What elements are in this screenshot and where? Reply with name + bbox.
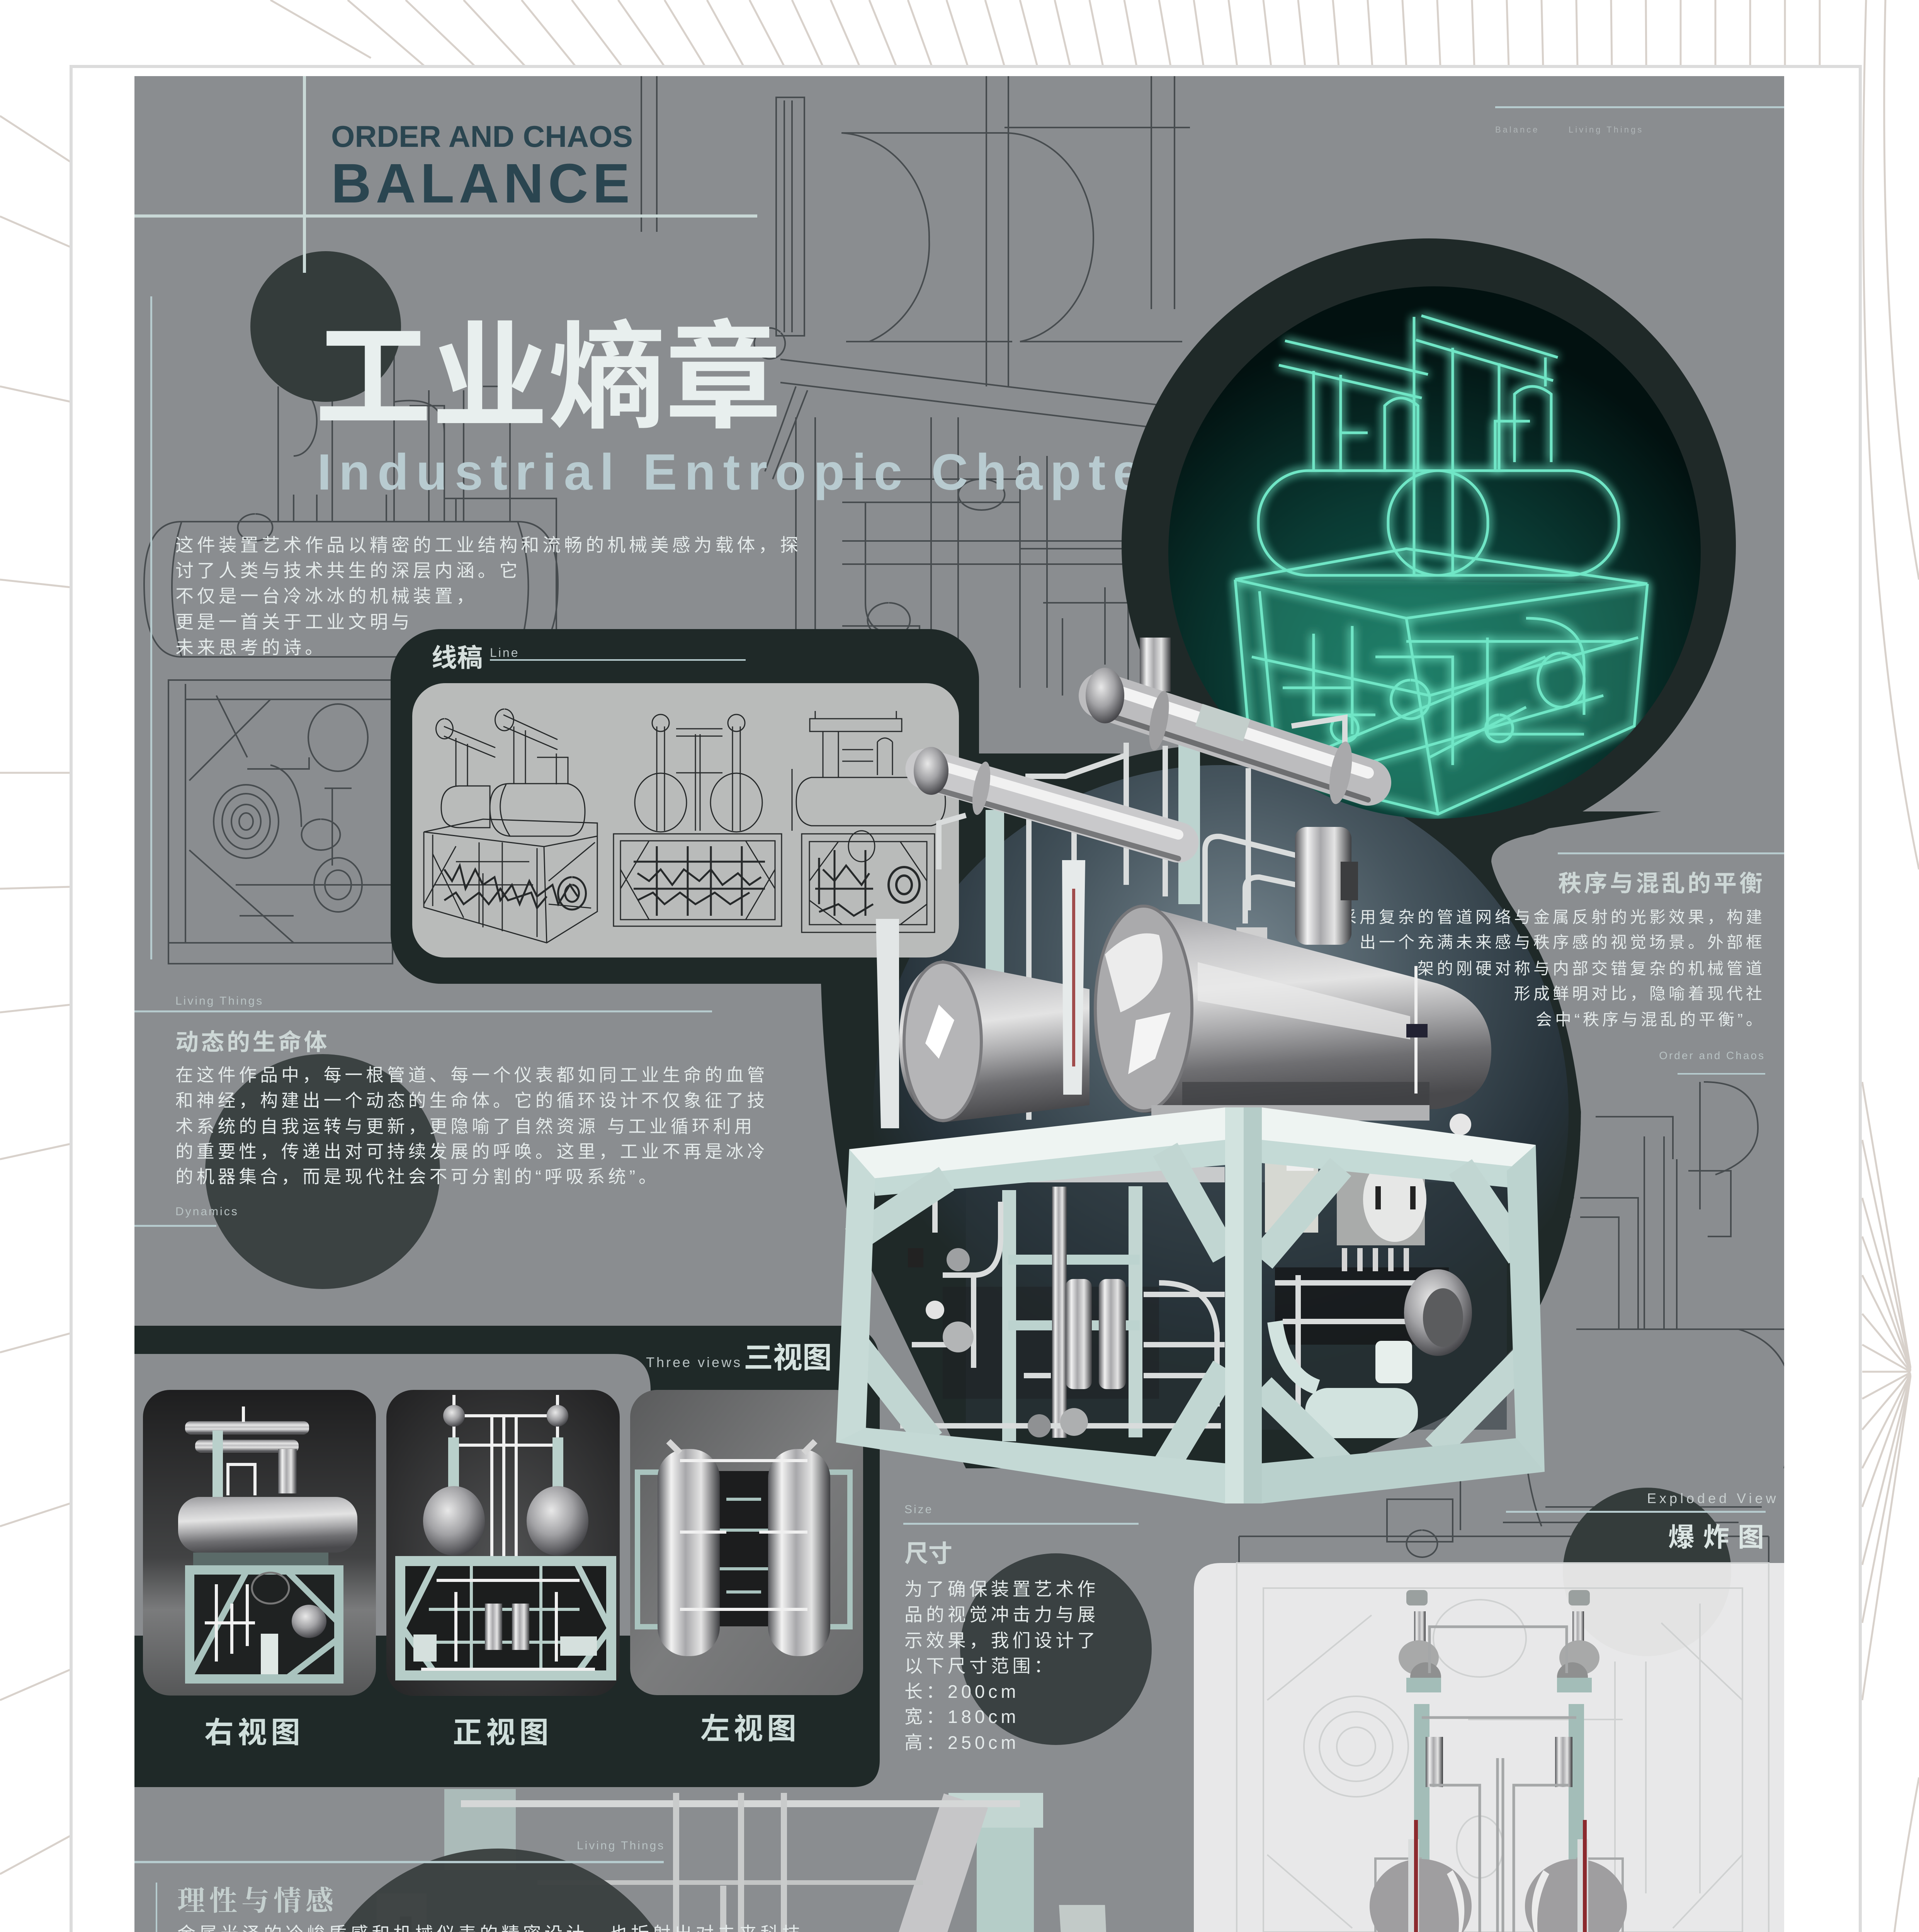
paragraph: 宽：180cm (904, 1706, 1019, 1727)
exploded: upper assemblies (1399, 1590, 1599, 1932)
top right small label: Balance (1495, 125, 1540, 134)
view labels: 正视图 (453, 1716, 552, 1749)
brand: order and chaos: BALANCE (331, 152, 630, 214)
paragraph: 为了确保装置艺术作 (904, 1579, 1099, 1599)
label: line: Line (490, 646, 519, 660)
right sphere (827, 1905, 1236, 1932)
top right small label (1495, 106, 1784, 134)
section: size: Size (904, 1503, 933, 1516)
intro text: 讨了人类与技术共生的深层内涵。它 (175, 560, 521, 581)
gradient disc behind hero (873, 765, 1569, 1461)
hero: vertical vessel (1236, 827, 1358, 945)
paragraph: 示效果，我们设计了 (904, 1630, 1099, 1651)
heading: 动态的生命体 (175, 1029, 330, 1055)
right section: order and chaos text: Order and Chaos (1659, 1049, 1765, 1061)
line drawing: side (792, 711, 945, 932)
brand: order and chaos (331, 119, 633, 214)
line drawing: perspective (424, 709, 597, 943)
paragraph: 在这件作品中，每一根管道、每一个仪表都如同工业生命的血管 (175, 1065, 768, 1085)
glowing wireframe disc (1159, 270, 1719, 831)
heading: 爆炸图 (1668, 1523, 1773, 1552)
dark blob (391, 238, 1736, 1468)
section: exploded view (1506, 1490, 1779, 1552)
panel: three views (134, 1326, 880, 1787)
wireframe: lower-left machine (168, 680, 393, 964)
section: reason and emotion: Living Things (577, 1839, 665, 1852)
right section: order and chaos text: 秩序与混乱的平衡 (1558, 871, 1765, 896)
paragraph: 以下尺寸范围： (904, 1656, 1056, 1676)
card: left view (630, 1390, 863, 1695)
panel: exploded diagram (1194, 1563, 1784, 1932)
section: living organism: Dynamics (175, 1205, 239, 1218)
title: 工业熵章 (315, 313, 782, 443)
paragraph: 的重要性，传递出对可持续发展的呼唤。这里，工业不再是冰冷 (175, 1141, 768, 1162)
section: size (903, 1503, 1139, 1753)
wireframe: title-side machine (143, 356, 559, 658)
paragraph: 的机器集合，而是现代社会不可分割的“呼吸系统”。 (175, 1167, 660, 1187)
intro text: 这件装置艺术作品以精密的工业结构和流畅的机械美感为载体，探 (175, 535, 802, 555)
gray notch right of blob (1468, 811, 1784, 1430)
columns and pipes (444, 1789, 1043, 1932)
hero: upper headers (914, 638, 1368, 859)
label: three views: Three views (646, 1354, 742, 1370)
heading: 理性与情感 (177, 1886, 338, 1917)
background wireframe drawing (144, 76, 1793, 1563)
card: front view (386, 1390, 620, 1696)
section: living organism: Living Things (175, 995, 263, 1007)
card: right view (143, 1390, 376, 1696)
left sphere (248, 1893, 625, 1932)
intro text: 更是一首关于工业文明与 (175, 612, 413, 632)
hero: front tank (1062, 860, 1491, 1135)
heading: three views: 三视图 (744, 1342, 832, 1374)
decorative dark circles (205, 251, 1731, 1932)
intro text: 不仅是一台冷冰冰的机械装置， (175, 586, 478, 606)
faint wire background (1237, 1563, 1769, 1932)
bottom scene: spheres and gauges (248, 1789, 1236, 1932)
section: reason and emotion (134, 1839, 825, 1932)
line drawing: front (614, 714, 782, 926)
brand header lines (134, 76, 757, 959)
heading: line: 线稿 (432, 643, 483, 672)
hero machine (836, 638, 1545, 1503)
paragraph: 品的视觉冲击力与展 (904, 1604, 1099, 1625)
subtitle: Industrial Entropic Chapter (317, 444, 1169, 500)
right section: order and chaos text: 出一个充满未来感与秩序感的视觉场景。外部框 (1360, 933, 1765, 951)
heading: 尺寸 (904, 1541, 952, 1567)
section: exploded view: Exploded View (1647, 1490, 1779, 1506)
view labels (204, 1713, 800, 1749)
paragraph: 术系统的自我运转与更新，更隐喻了自然资源 与工业循环利用 (175, 1116, 755, 1136)
right section: order and chaos text: 采用复杂的管道网络与金属反射的光影效果，构建 (1340, 908, 1765, 926)
exploded: tanks (1370, 1820, 1627, 1932)
hero: interior (900, 1128, 1507, 1441)
wireframe: upper tanks (641, 76, 1198, 703)
hero: upper supports and pipes (939, 718, 1345, 1120)
view labels: 右视图 (204, 1716, 304, 1749)
view labels: 左视图 (700, 1713, 800, 1745)
glowing machine (1235, 316, 1647, 814)
section: living organism (134, 995, 768, 1227)
top right small label: Living Things (1569, 125, 1644, 134)
right section: order and chaos text (1340, 852, 1784, 1075)
brand: order and chaos: ORDER AND CHAOS (331, 119, 633, 153)
right section: order and chaos text: 架的刚硬对称与内部交错复杂的机械管道 (1418, 959, 1765, 978)
hero: rear tank (876, 919, 1090, 1128)
paragraph: 长：200cm (904, 1681, 1019, 1702)
right wire redraw (1484, 1082, 1793, 1468)
right section: order and chaos text: 形成鲜明对比，隐喻着现代社 (1514, 985, 1765, 1003)
paragraph: 高：250cm (904, 1732, 1019, 1753)
right section: order and chaos text: 会中“秩序与混乱的平衡”。 (1536, 1010, 1765, 1029)
intro text: 未来思考的诗。 (175, 637, 326, 658)
hero: frame (836, 1107, 1545, 1503)
paragraph: 和神经，构建出一个动态的生命体。它的循环设计不仅象征了技 (175, 1090, 768, 1111)
panel: line drawings (412, 643, 959, 957)
wireframe: right machine (1239, 1082, 1793, 1563)
